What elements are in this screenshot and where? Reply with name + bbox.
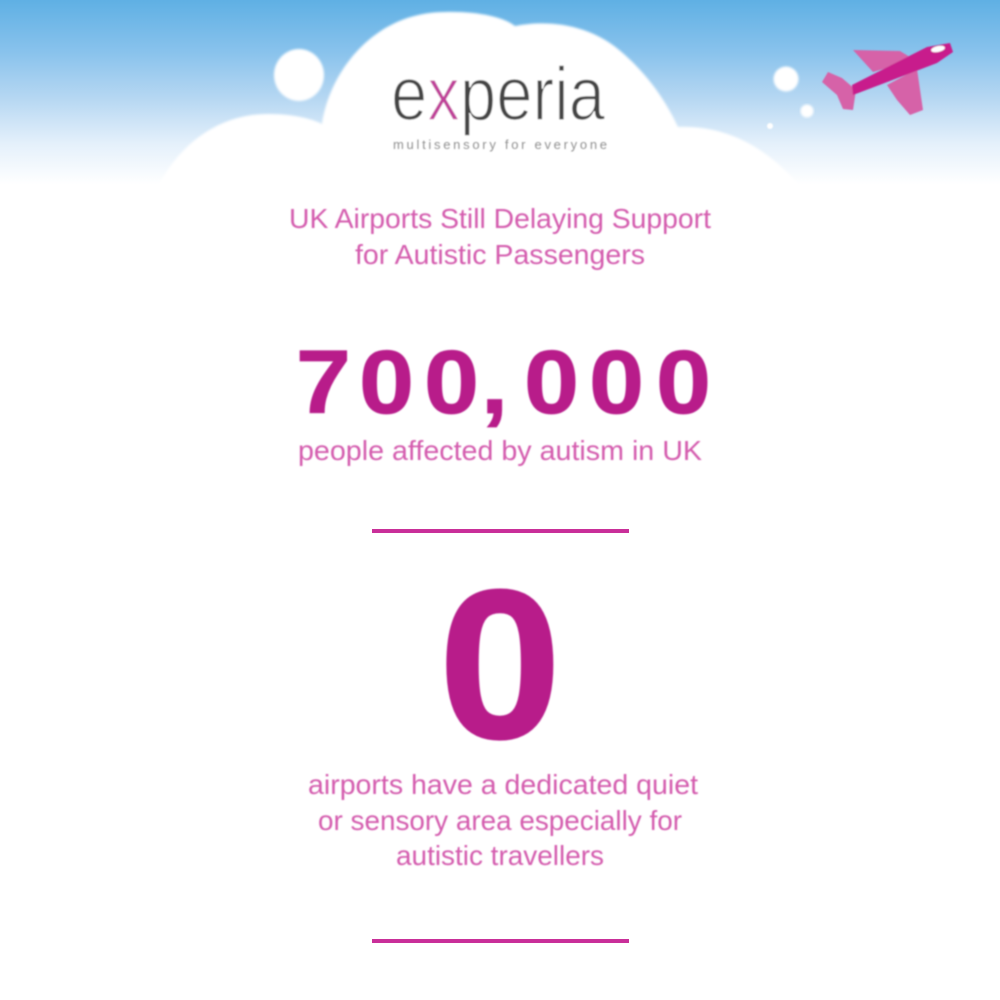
logo wordmark: experia xyxy=(391,52,606,137)
bubble: left of cloud xyxy=(274,49,324,101)
caption 0: autistic travellers xyxy=(396,840,604,871)
caption 700,000: people affected by autism in UK xyxy=(298,435,703,466)
plane fuselage xyxy=(852,43,953,95)
plane upper wing xyxy=(853,50,915,72)
bubble: small near plane xyxy=(767,123,773,129)
caption 0: or sensory area especially for xyxy=(318,805,682,836)
stat: 0 xyxy=(308,545,698,871)
caption 0 xyxy=(308,769,698,871)
divider xyxy=(372,939,629,943)
stat: 700,000 xyxy=(296,332,711,466)
big number 0: 0 xyxy=(439,545,561,783)
bubble: large near plane xyxy=(774,66,798,92)
title: UK Airports Still Delaying Support xyxy=(289,203,711,234)
big number 700,000: 700,000 xyxy=(296,332,711,433)
bubble: medium near plane xyxy=(800,104,814,118)
title xyxy=(289,203,711,270)
plane tail xyxy=(822,72,856,110)
logo tagline: multisensory for everyone xyxy=(393,137,607,152)
logo xyxy=(391,52,607,152)
caption 0: airports have a dedicated quiet xyxy=(308,769,698,800)
plane window xyxy=(931,45,945,53)
cloud xyxy=(150,12,815,260)
title: for Autistic Passengers xyxy=(355,239,645,270)
sky background xyxy=(0,0,1000,205)
divider xyxy=(372,529,629,533)
plane lower wing xyxy=(887,69,923,115)
icon: plane xyxy=(822,43,953,115)
